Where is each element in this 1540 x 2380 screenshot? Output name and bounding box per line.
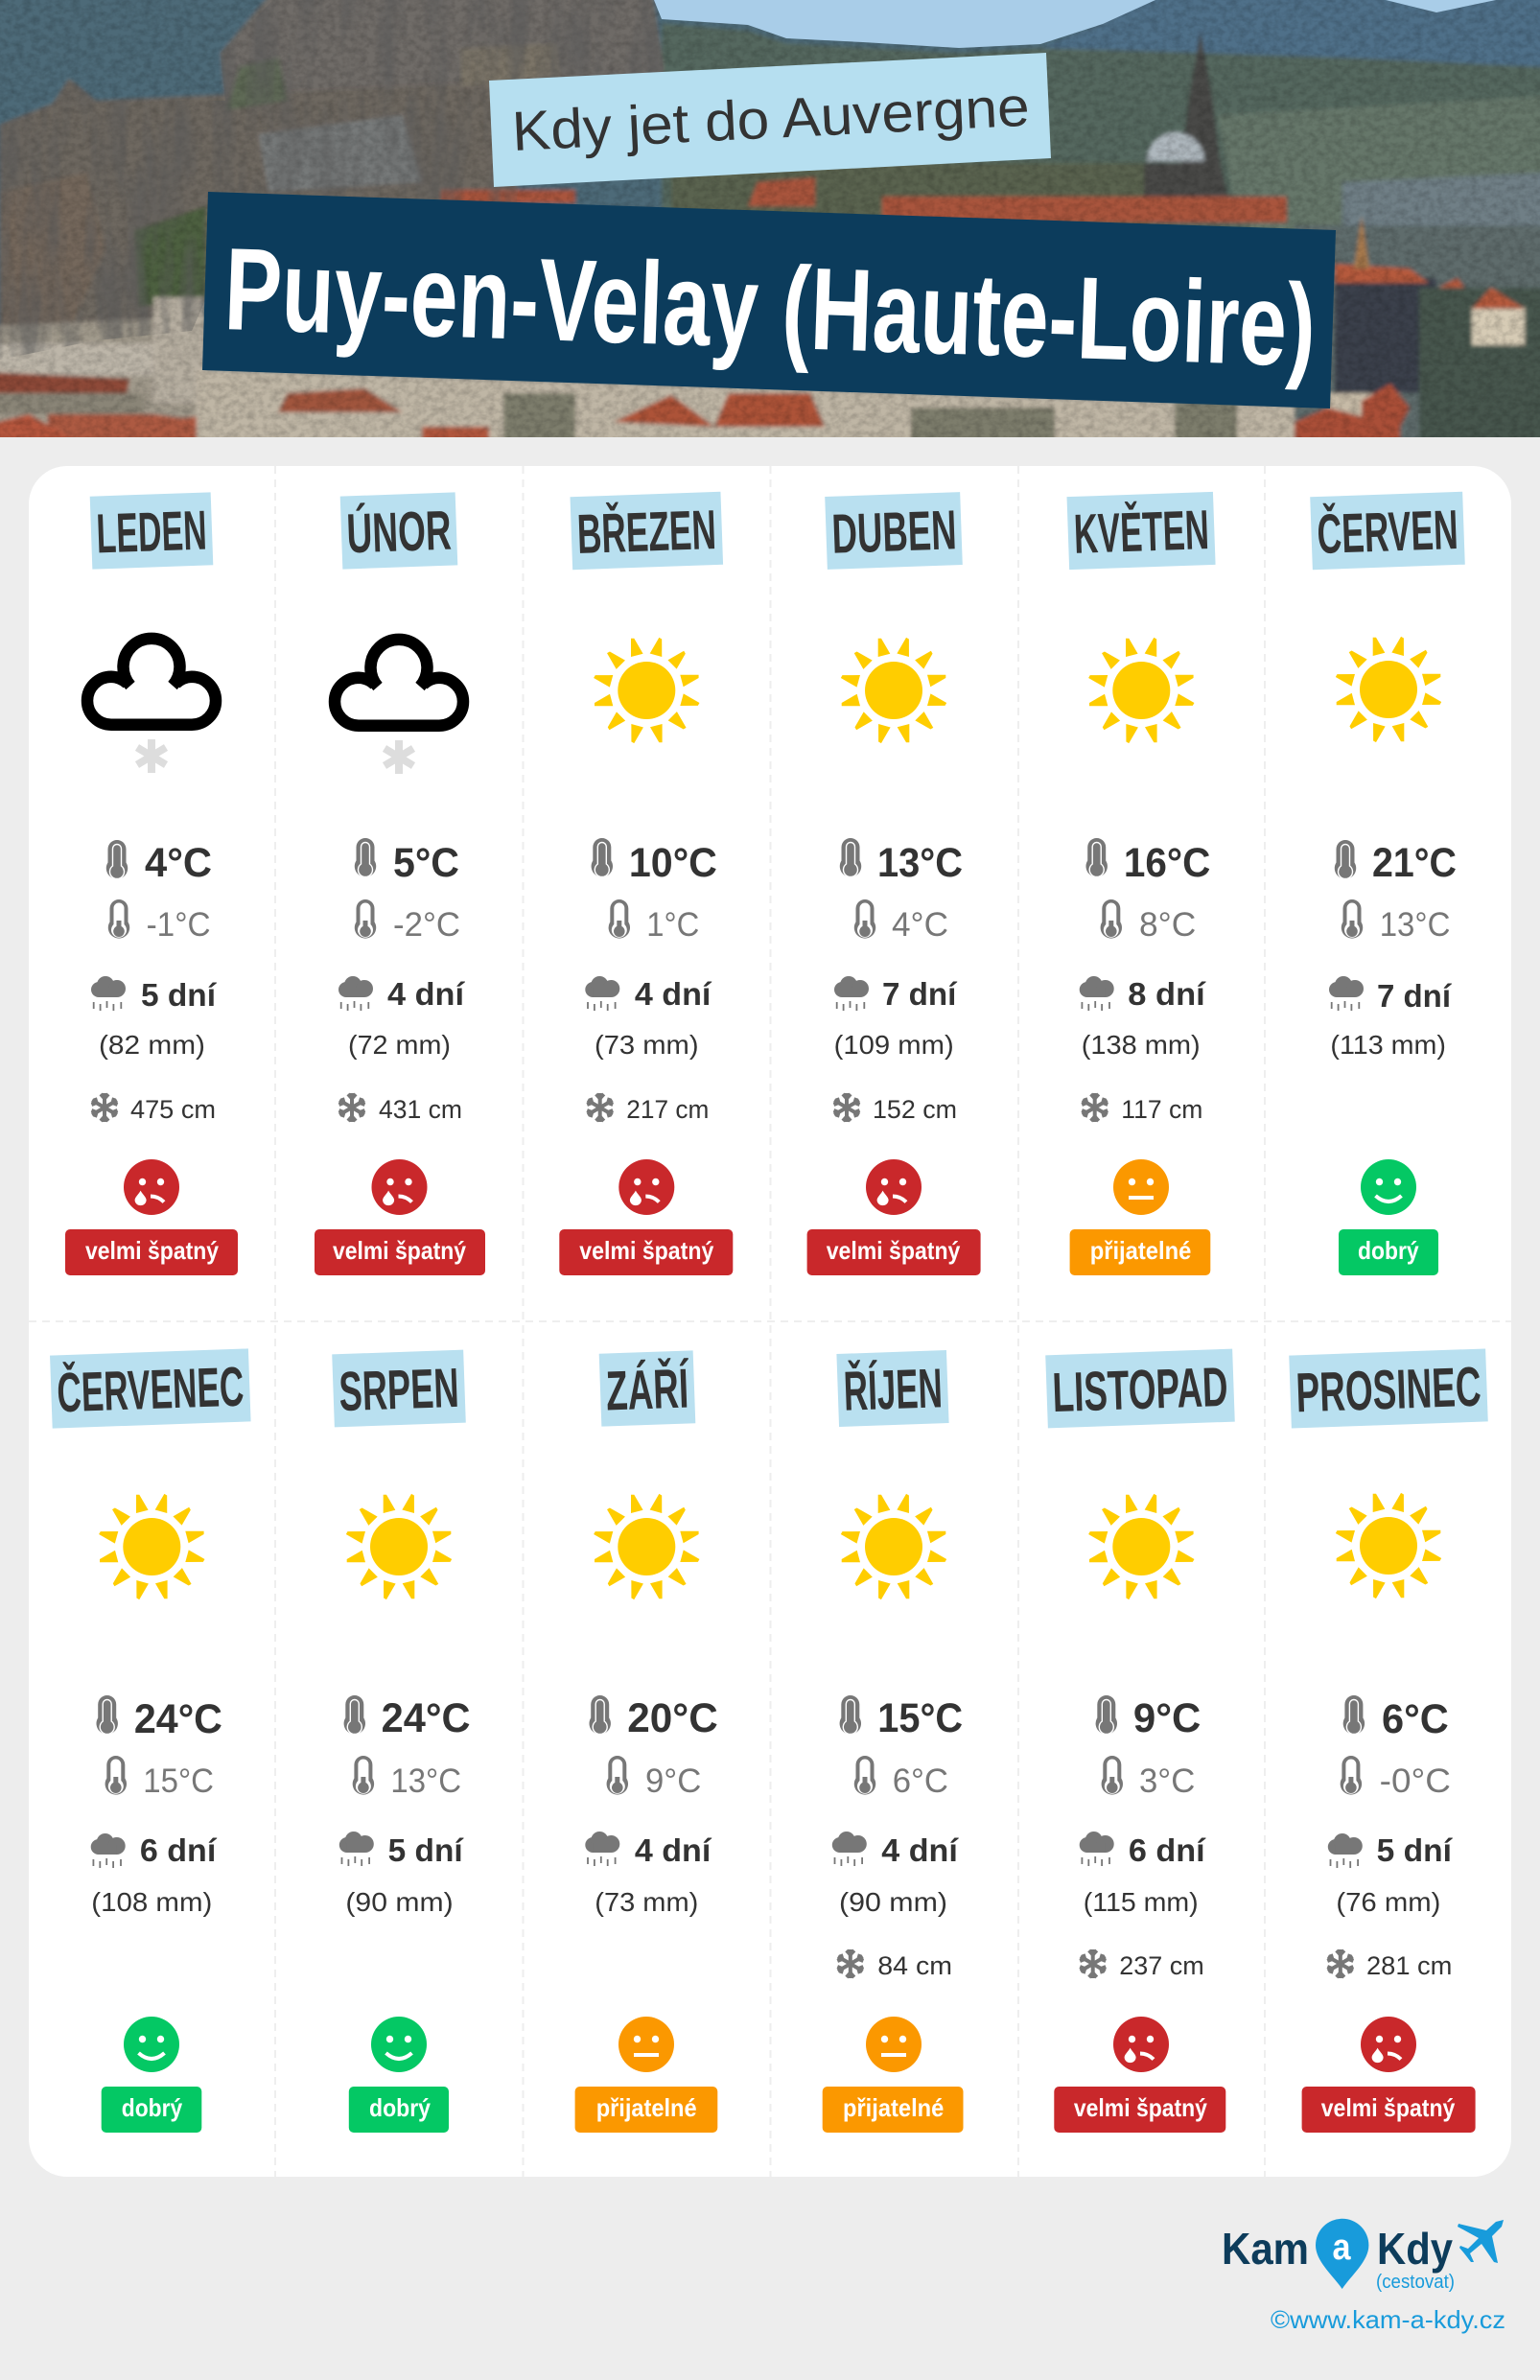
high temperature — [1335, 840, 1457, 886]
rainy days — [338, 976, 466, 1012]
high temperature: 21°C — [1372, 840, 1457, 886]
month label: LISTOPAD — [1045, 1349, 1235, 1428]
rainy days: 4 dní — [387, 976, 466, 1012]
low temperature — [609, 899, 699, 944]
rating badge — [807, 1229, 981, 1275]
month label: ČERVENEC — [50, 1348, 251, 1429]
rating badge — [65, 1229, 238, 1275]
rainy days: 7 dní — [882, 976, 958, 1012]
low temperature: 15°C — [143, 1762, 214, 1800]
low temperature: 4°C — [892, 906, 948, 944]
icon: airplane — [1458, 2220, 1504, 2263]
icon: happy face — [371, 2017, 427, 2072]
month label: KVĚTEN: KVĚTEN — [1073, 499, 1210, 566]
snowfall: 431 cm — [379, 1095, 462, 1124]
low temperature — [1342, 899, 1450, 944]
rainy days — [339, 1832, 465, 1868]
panel: květen — [1067, 492, 1216, 1275]
high temperature — [344, 1695, 470, 1741]
icon: neutral face — [866, 2017, 922, 2072]
rainy days: 4 dní — [635, 976, 712, 1012]
rating badge — [1339, 1229, 1438, 1275]
icon: sun — [594, 1494, 699, 1599]
rainfall: (108 mm) — [91, 1887, 212, 1917]
high temperature: 6°C — [1382, 1696, 1449, 1742]
low temperature — [108, 899, 211, 944]
high temperature: 10°C — [629, 840, 717, 886]
low temperature — [1341, 1756, 1451, 1800]
rainfall: (72 mm) — [348, 1030, 451, 1060]
month label: DUBEN — [825, 492, 963, 570]
low temperature — [607, 1756, 701, 1800]
logo: Kam a Kdy (cestovat): (cestovat) — [1376, 2272, 1455, 2293]
rainy days — [91, 1832, 218, 1868]
high temperature: 13°C — [877, 840, 963, 886]
low temperature: -0°C — [1380, 1762, 1451, 1800]
snowfall: 84 cm — [877, 1951, 952, 1980]
icon: sad face — [866, 1159, 922, 1215]
month label: LEDEN — [90, 492, 213, 570]
icon: map pin: a — [1333, 2228, 1351, 2268]
rating badge — [823, 2087, 963, 2133]
rainfall: (113 mm) — [1330, 1030, 1446, 1060]
rainy days: 5 dní — [388, 1832, 465, 1868]
rainy days — [1080, 1832, 1207, 1868]
high temperature — [97, 1695, 222, 1742]
low temperature: 13°C — [1380, 906, 1450, 944]
month label: ÚNOR — [340, 492, 457, 570]
snowfall: 237 cm — [1119, 1951, 1204, 1980]
rating badge: velmi špatný — [1321, 2093, 1456, 2122]
panel: březen — [559, 492, 733, 1275]
logo: Kam a Kdy (cestovat): Kam — [1222, 2224, 1309, 2274]
rating badge — [1302, 2087, 1476, 2133]
high temperature: 16°C — [1124, 840, 1210, 886]
high temperature — [1343, 1695, 1449, 1742]
low temperature: 1°C — [646, 906, 699, 944]
rating badge: přijatelné — [596, 2093, 697, 2122]
rainfall: (90 mm) — [839, 1887, 947, 1917]
icon: sun — [1088, 638, 1194, 743]
rainy days: 6 dní — [140, 1832, 218, 1868]
rainy days — [834, 976, 958, 1012]
low temperature — [854, 899, 948, 944]
low temperature: 13°C — [390, 1762, 461, 1800]
rainy days — [91, 976, 218, 1013]
high temperature — [840, 1695, 963, 1741]
heading: Kdy jet do Auvergne: Kdy jet do Auvergne — [510, 76, 1031, 163]
high temperature — [840, 838, 963, 886]
icon: happy face — [1361, 1159, 1416, 1215]
month label: ÚNOR: ÚNOR — [345, 500, 453, 565]
rainfall: (90 mm) — [345, 1887, 454, 1917]
month label: KVĚTEN — [1067, 492, 1216, 570]
low temperature — [1101, 899, 1196, 944]
panel: únor — [315, 492, 485, 1275]
low temperature: 6°C — [893, 1762, 948, 1800]
rainfall: (138 mm) — [1082, 1030, 1201, 1060]
rainfall: (115 mm) — [1084, 1887, 1199, 1917]
snowfall — [1327, 1949, 1452, 1980]
icon: map pin — [1316, 2219, 1368, 2289]
rainy days — [1329, 976, 1453, 1014]
rainy days: 7 dní — [1377, 978, 1453, 1014]
panel: červen — [1310, 492, 1465, 1275]
snowfall: 475 cm — [130, 1095, 216, 1124]
snowfall — [834, 1093, 957, 1124]
rating badge: velmi špatný — [333, 1236, 466, 1265]
icon: sad face — [1113, 2017, 1169, 2072]
panel: listopad — [1045, 1349, 1235, 2133]
rainy days — [1080, 976, 1207, 1012]
month label: LEDEN: LEDEN — [95, 500, 208, 565]
icon: sad face — [1361, 2017, 1416, 2072]
panel: říjen — [823, 1350, 963, 2133]
snowfall — [1080, 1949, 1204, 1980]
logo: Kam a Kdy (cestovat) — [1222, 2219, 1504, 2293]
rating badge — [1070, 1229, 1210, 1275]
rainy days — [1328, 1832, 1454, 1868]
rating badge: velmi špatný — [85, 1236, 219, 1265]
high temperature: 5°C — [393, 840, 459, 886]
panel: září — [575, 1350, 718, 2133]
icon: snow cloud — [335, 640, 463, 774]
header photo: Le Puy-en-Velay town, rock and cathedral — [0, 0, 1540, 447]
rainy days: 4 dní — [635, 1832, 712, 1868]
month label: BŘEZEN: BŘEZEN — [576, 499, 717, 566]
rating badge: dobrý — [122, 2093, 183, 2122]
panel: srpen — [332, 1350, 470, 2133]
rating badge — [349, 2087, 449, 2133]
icon: sad face — [372, 1159, 428, 1215]
snowfall — [339, 1093, 462, 1124]
high temperature: 9°C — [1133, 1695, 1201, 1741]
rainy days — [585, 1832, 712, 1868]
high temperature — [1086, 838, 1210, 886]
icon: happy face — [124, 2017, 179, 2072]
icon: neutral face — [618, 2017, 674, 2072]
snowfall — [92, 1093, 216, 1124]
snowfall: 117 cm — [1121, 1095, 1202, 1124]
snowfall: 152 cm — [873, 1095, 957, 1124]
sky — [654, 0, 1496, 48]
panel: leden — [65, 492, 238, 1275]
rainfall: (76 mm) — [1336, 1887, 1440, 1917]
month label: ŘÍJEN: ŘÍJEN — [843, 1357, 944, 1423]
icon: sun — [99, 1494, 204, 1599]
low temperature — [355, 899, 460, 944]
rainy days: 5 dní — [141, 977, 218, 1013]
snowfall: 217 cm — [626, 1095, 709, 1124]
low temperature: 3°C — [1139, 1762, 1195, 1800]
snowfall: 281 cm — [1366, 1951, 1452, 1980]
month label: ČERVENEC: ČERVENEC — [56, 1356, 245, 1424]
rating badge — [315, 1229, 485, 1275]
month label: LISTOPAD: LISTOPAD — [1051, 1356, 1229, 1424]
panel: červenec — [50, 1348, 251, 2133]
panel: prosinec — [1289, 1348, 1488, 2133]
snowfall — [1082, 1093, 1202, 1124]
month label: ŘÍJEN — [836, 1350, 949, 1427]
high temperature: 15°C — [877, 1695, 963, 1741]
rainy days: 4 dní — [881, 1832, 960, 1868]
rating badge — [559, 1229, 733, 1275]
icon: sun — [841, 1494, 946, 1599]
icon: sad face — [618, 1159, 674, 1215]
rating badge: velmi špatný — [579, 1236, 714, 1265]
icon: sad face — [124, 1159, 179, 1215]
rainy days: 6 dní — [1129, 1832, 1207, 1868]
month label: SRPEN — [332, 1350, 466, 1427]
rating badge — [1054, 2087, 1225, 2133]
icon: sun — [594, 638, 699, 743]
high temperature — [589, 1695, 718, 1741]
rainfall: (82 mm) — [99, 1030, 205, 1060]
low temperature: -2°C — [393, 906, 460, 944]
low temperature — [353, 1756, 461, 1800]
rating badge: přijatelné — [1090, 1236, 1191, 1265]
icon: sun — [1088, 1494, 1194, 1599]
rating badge: dobrý — [369, 2093, 431, 2122]
high temperature: 20°C — [627, 1695, 718, 1741]
high temperature: 24°C — [382, 1695, 470, 1741]
heading: Kdy jet do Auvergne — [489, 53, 1051, 187]
high temperature: 24°C — [134, 1696, 222, 1742]
icon: sun — [1336, 1493, 1441, 1598]
icon: sun — [1336, 637, 1441, 742]
high temperature: 4°C — [145, 840, 212, 886]
rainy days: 5 dní — [1377, 1832, 1454, 1868]
logo: Kam a Kdy (cestovat): Kdy — [1377, 2224, 1453, 2274]
low temperature — [1102, 1756, 1195, 1800]
rating badge — [102, 2087, 201, 2133]
month label: BŘEZEN — [571, 492, 723, 570]
rainfall: (109 mm) — [834, 1030, 954, 1060]
rainy days — [585, 976, 712, 1012]
rainy days: 8 dní — [1128, 976, 1207, 1012]
high temperature — [355, 838, 459, 886]
month label: ZÁŘÍ: ZÁŘÍ — [605, 1357, 690, 1422]
icon: sun — [841, 638, 946, 743]
rating badge: přijatelné — [843, 2093, 944, 2122]
rating badge: velmi špatný — [827, 1236, 961, 1265]
rainfall: (73 mm) — [595, 1887, 698, 1917]
icon: snow cloud — [87, 639, 216, 773]
low temperature — [854, 1756, 948, 1800]
rating badge: velmi špatný — [1074, 2093, 1207, 2122]
website link: ©www.kam-a-kdy.cz — [1271, 2305, 1505, 2334]
low temperature — [105, 1756, 214, 1800]
snowfall — [837, 1949, 952, 1980]
month label: DUBEN: DUBEN — [830, 499, 958, 566]
low temperature: 9°C — [645, 1762, 701, 1800]
low temperature: 8°C — [1139, 906, 1196, 944]
month label: ČERVEN — [1310, 492, 1465, 570]
month label: ZÁŘÍ — [599, 1350, 695, 1427]
rainy days — [832, 1832, 960, 1868]
rating badge: dobrý — [1358, 1236, 1419, 1265]
panel: duben — [807, 492, 981, 1275]
rating badge — [575, 2087, 717, 2133]
low temperature: -1°C — [147, 906, 211, 944]
icon: neutral face — [1113, 1159, 1169, 1215]
high temperature — [592, 838, 717, 886]
high temperature — [1096, 1695, 1201, 1741]
snowfall — [587, 1093, 709, 1124]
panel: monthly climate table — [29, 466, 1511, 2177]
month label: SRPEN: SRPEN — [338, 1357, 460, 1423]
rainfall: (73 mm) — [595, 1030, 699, 1060]
icon: sun — [346, 1494, 452, 1599]
high temperature — [106, 840, 212, 886]
